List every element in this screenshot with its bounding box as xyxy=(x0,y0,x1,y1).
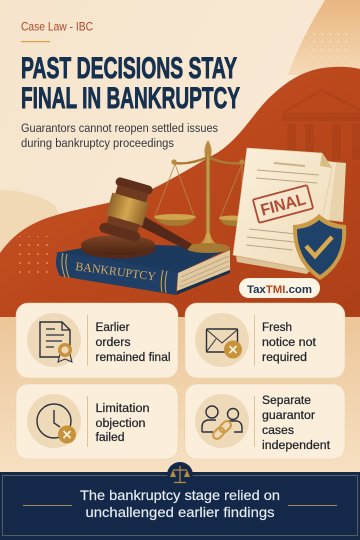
lower background xyxy=(0,317,360,472)
shield with check xyxy=(293,214,346,280)
card text: objection xyxy=(96,416,146,430)
taxtmi badge: TaxTMI.com xyxy=(247,284,312,296)
divider xyxy=(254,396,255,447)
card text: orders xyxy=(96,335,130,349)
book: bankruptcy: BANKRUPTCY xyxy=(75,259,157,284)
card text: Fresh xyxy=(262,320,292,334)
emblem: scales xyxy=(167,462,193,488)
faint courthouse xyxy=(282,90,360,160)
icon: certificate document xyxy=(27,313,81,367)
title: FINAL IN BANKRUPTCY xyxy=(21,82,240,115)
divider xyxy=(254,315,255,366)
footer text: unchallenged earlier findings xyxy=(86,504,274,520)
gavel xyxy=(81,176,192,258)
icon: linked guarantors xyxy=(195,394,249,448)
title xyxy=(21,52,240,115)
card text xyxy=(96,401,150,444)
card: limitation xyxy=(16,384,178,459)
card: fresh notice xyxy=(185,303,345,378)
divider xyxy=(87,315,88,366)
footer banner xyxy=(0,462,360,540)
card text: failed xyxy=(96,430,125,444)
final document xyxy=(233,148,346,274)
card text xyxy=(262,320,317,364)
card text: Separate xyxy=(262,393,311,407)
scales of justice xyxy=(154,140,245,253)
icon: envelope with x xyxy=(195,313,249,367)
orange wave xyxy=(0,67,360,320)
taxtmi badge xyxy=(239,278,320,298)
card text: Earlier xyxy=(96,320,130,334)
subtitle: during bankruptcy proceedings xyxy=(21,136,174,150)
card text: cases xyxy=(262,423,294,437)
card: separate cases xyxy=(185,384,345,459)
footer text: The bankruptcy stage relied on xyxy=(80,487,280,503)
divider xyxy=(87,396,88,447)
card text: required xyxy=(262,350,307,364)
card text xyxy=(96,320,170,364)
card text: Limitation xyxy=(96,401,150,415)
subtitle xyxy=(21,121,218,150)
card: earlier orders xyxy=(16,303,178,378)
icon: clock with x xyxy=(27,394,81,448)
dot pattern top right xyxy=(306,28,347,58)
footer text xyxy=(80,487,280,520)
dot pattern lower left xyxy=(15,236,48,278)
card text: independent xyxy=(262,438,331,452)
book: bankruptcy xyxy=(55,243,231,295)
card text: remained final xyxy=(96,350,170,364)
gold rule xyxy=(21,41,50,42)
divider right xyxy=(288,505,337,506)
subtitle: Guarantors cannot reopen settled issues xyxy=(21,121,218,135)
title: PAST DECISIONS STAY xyxy=(21,52,237,85)
card text: guarantor xyxy=(262,408,315,422)
tag: case law: Case Law - IBC xyxy=(21,20,93,34)
final document: FINAL xyxy=(259,190,308,220)
card text xyxy=(262,393,331,452)
card text: notice not xyxy=(262,335,317,349)
divider left xyxy=(23,505,72,506)
